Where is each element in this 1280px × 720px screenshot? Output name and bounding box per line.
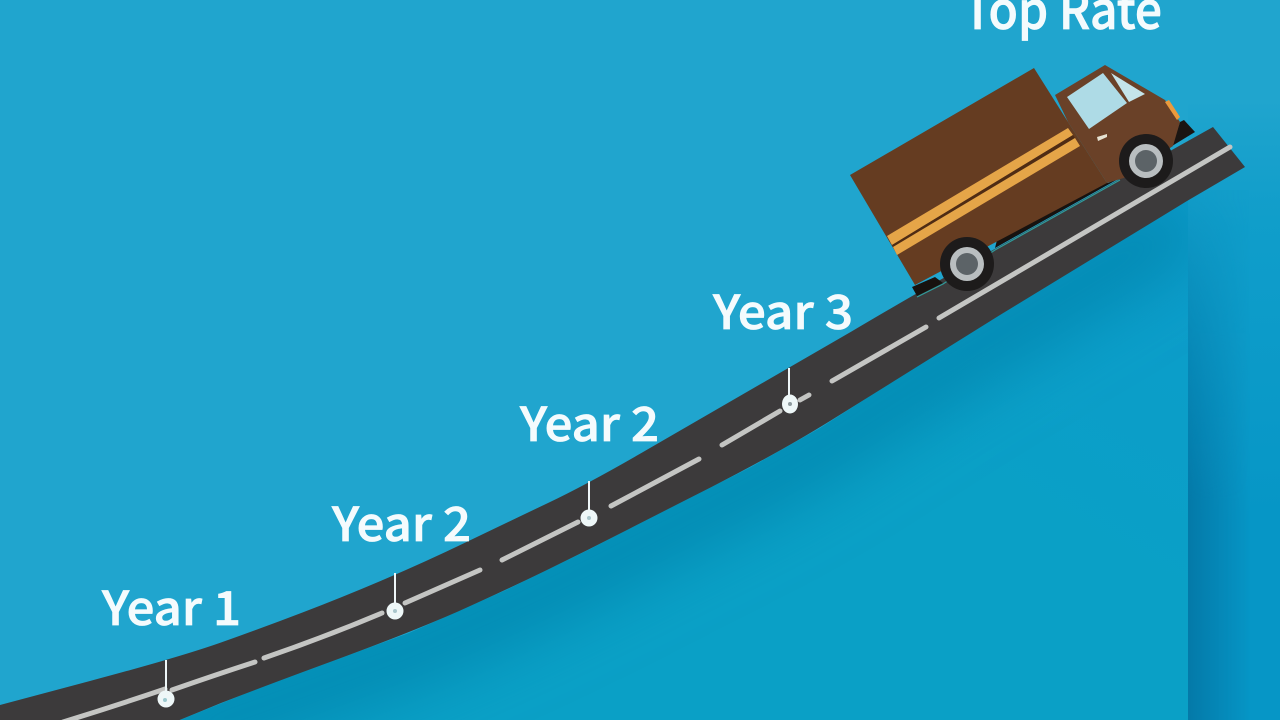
road contact line bbox=[917, 180, 1120, 297]
road shadow on wall bbox=[150, 219, 1187, 720]
milestone: Year 3 bbox=[712, 274, 853, 414]
front wheel bbox=[1119, 134, 1173, 188]
right wall band bbox=[1188, 100, 1280, 720]
box stripes bbox=[887, 128, 1073, 245]
door handle bbox=[1097, 134, 1107, 141]
truck undercarriage bbox=[995, 178, 1120, 248]
headlight bbox=[1165, 100, 1180, 120]
road centre dashes bbox=[63, 147, 1230, 720]
label: Year 2: Year 2 bbox=[331, 486, 471, 555]
front bumper bbox=[1172, 120, 1195, 146]
label: Year 3: Year 3 bbox=[712, 274, 853, 343]
shaded wall below road bbox=[140, 200, 1188, 720]
milestone: Year 2 first bbox=[331, 486, 471, 620]
cab side window bbox=[1067, 73, 1127, 129]
rear wheel bbox=[940, 237, 994, 291]
cargo box bbox=[850, 68, 1107, 285]
cab bbox=[1055, 65, 1180, 183]
label: Year 1: Year 1 bbox=[101, 570, 241, 639]
cab front window bbox=[1111, 73, 1145, 102]
truck bbox=[850, 65, 1195, 297]
rear bumper bbox=[912, 277, 943, 296]
milestone: Year 1 bbox=[101, 570, 241, 708]
milestone: Year 2 second bbox=[519, 386, 659, 526]
label: Year 2: Year 2 bbox=[519, 386, 659, 455]
